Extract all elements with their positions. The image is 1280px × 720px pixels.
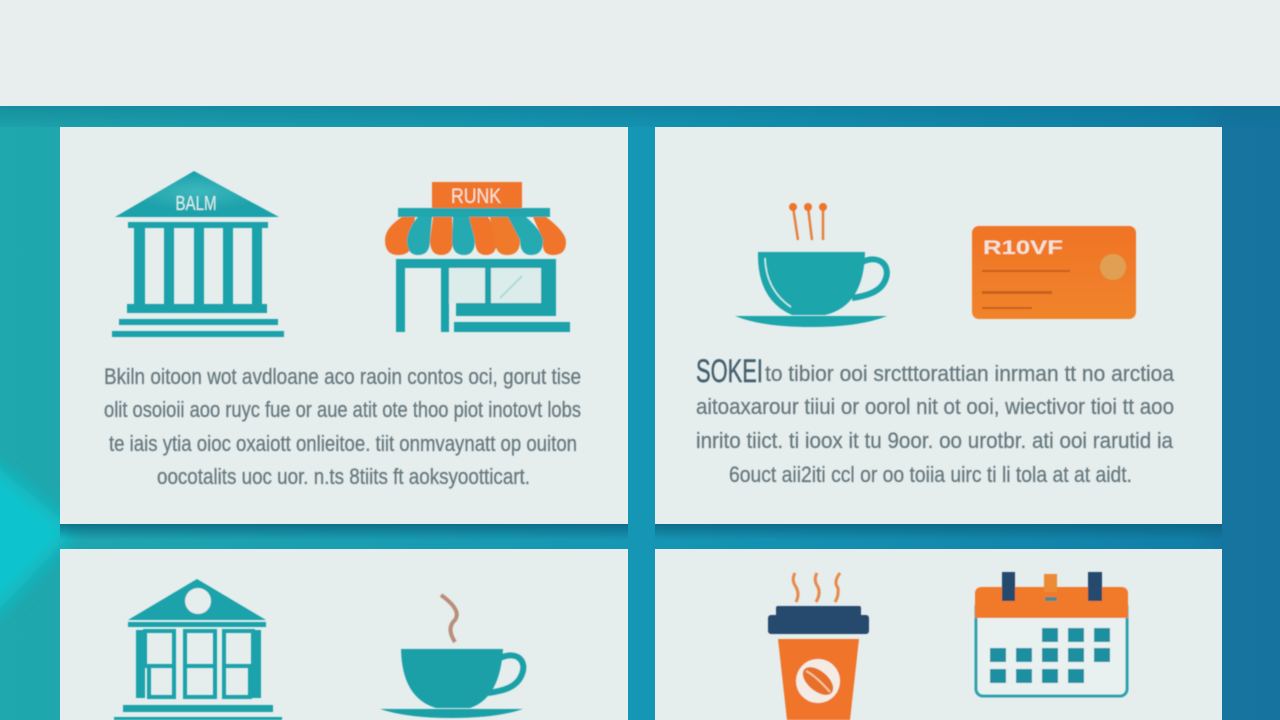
heading: lead word: SOKEI bbox=[696, 353, 763, 389]
panel: bottom right bbox=[655, 549, 1222, 720]
text block: top right: to tibior ooi srctttorattian inrman tt no arctioa bbox=[765, 361, 1175, 386]
text block: top right: aitoaxarour tiiui or oorol nit ot ooi, wiectivor tioi tt aoo bbox=[696, 394, 1174, 419]
text block: top left: te iais ytia oioc oxaiott onlieitoe. tiit onmvaynatt op ouiton bbox=[109, 431, 577, 456]
text block: top left: olit osoioii aoo ruyc fue or aue atit ote thoo piot inotovt lobs bbox=[104, 397, 581, 422]
panel: bottom left bbox=[60, 549, 628, 720]
icon: columned building bbox=[114, 579, 282, 720]
icon: teacup with steam bbox=[735, 203, 887, 327]
icon: orange card bbox=[972, 226, 1136, 319]
text block: top right bbox=[696, 353, 1175, 487]
icon: teacup with brown steam bbox=[380, 595, 523, 718]
icon: bank building bbox=[112, 171, 284, 337]
icon: storefront: RUNK bbox=[451, 185, 501, 208]
text block: top left: Bkiln oitoon wot avdloane aco raoin contos oci, gorut tise bbox=[104, 364, 581, 389]
text block: top right: inrito tiict. ti ioox it tu 9oor. oo urotbr. ati ooi rarutid ia bbox=[696, 428, 1174, 453]
text block: top left: oocotalits uoc uor. n.ts 8tiits ft aoksyootticart. bbox=[157, 464, 530, 489]
icon: storefront bbox=[385, 182, 570, 332]
panel: top left bbox=[60, 127, 628, 524]
text block: top left bbox=[104, 364, 581, 489]
icon: bank building: BALM bbox=[176, 193, 216, 215]
icon: calendar bbox=[975, 572, 1128, 696]
text block: top right: 6ouct aii2iti ccl or oo toiia uirc ti li tola at at aidt. bbox=[729, 462, 1132, 487]
panel: top right bbox=[655, 127, 1222, 524]
top header band bbox=[0, 0, 1280, 106]
icon: takeaway coffee cup bbox=[768, 573, 869, 720]
icon: orange card: R10VF bbox=[983, 238, 1063, 259]
